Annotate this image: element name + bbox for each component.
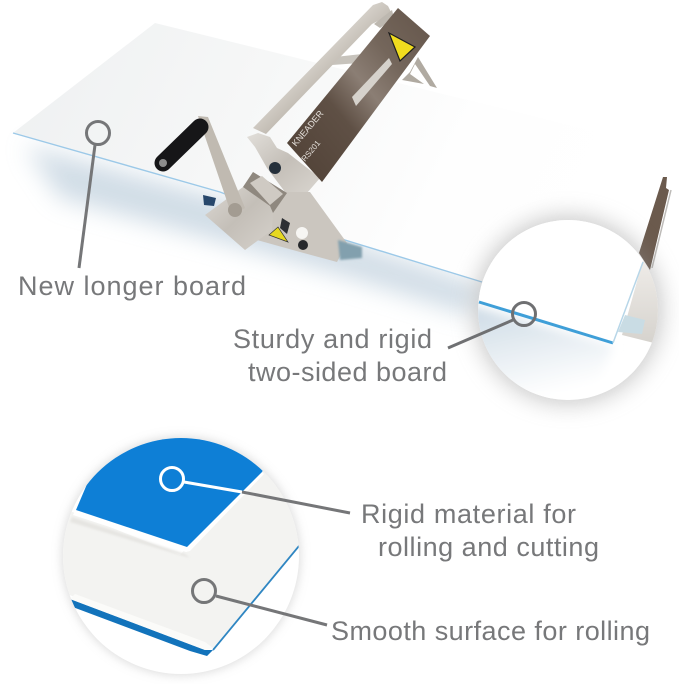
blue top face [76, 438, 263, 547]
tension knobs [298, 240, 308, 250]
crank arm [198, 116, 245, 216]
magnifier shadow [62, 437, 300, 675]
label: rigid material [361, 499, 599, 562]
panel handle [352, 58, 392, 106]
label: sturdy and rigid: Sturdy and rigid [233, 324, 432, 354]
brand text: KNEADER [290, 108, 326, 148]
brown plate tip [639, 190, 671, 270]
magnifier: board edge [470, 190, 671, 403]
rear cross brace [332, 54, 362, 65]
callout marker: new longer board [79, 122, 110, 268]
lower blue edge [70, 599, 213, 656]
label: sturdy and rigid [233, 324, 447, 387]
label: rigid material: Rigid material for [361, 499, 576, 529]
crank handle [163, 127, 200, 163]
shadow below bracket [338, 240, 362, 260]
rear stand leg [402, 57, 437, 88]
label: new longer board: New longer board [18, 271, 246, 301]
label: smooth surface: Smooth surface for rolling [331, 616, 650, 646]
label: sturdy and rigid: two-sided board [248, 357, 447, 387]
warning label [389, 33, 415, 61]
magnifier shadow [475, 217, 661, 403]
under-board shadow [478, 304, 608, 384]
sheeter machine: RS201 [300, 138, 323, 163]
rear metal plate [639, 177, 671, 270]
magnifier: board layers [55, 430, 305, 675]
blue edge [479, 302, 613, 343]
stainless panel [287, 8, 430, 182]
long white board [13, 23, 670, 288]
left clip [203, 195, 216, 206]
callout marker: rigid material [160, 468, 350, 513]
lower bracket [257, 192, 347, 262]
upper layer shadow [71, 518, 186, 556]
gear housing [205, 172, 287, 250]
dark window [280, 218, 290, 234]
upper white layer [73, 472, 264, 552]
metal end bracket [622, 261, 658, 342]
callout marker: two-sided board [448, 302, 536, 348]
sheeter machine [159, 2, 437, 262]
callout marker: smooth surface [192, 580, 327, 625]
lower plate highlight [72, 600, 205, 650]
top rail [253, 2, 392, 134]
warning label lower [269, 227, 288, 242]
shadow under board [25, 145, 480, 315]
board corner [479, 220, 582, 296]
label: rigid material: rolling and cutting [378, 532, 599, 562]
upper mounting plate [247, 133, 320, 193]
blue board edge [13, 133, 482, 282]
white board surface [55, 465, 305, 648]
